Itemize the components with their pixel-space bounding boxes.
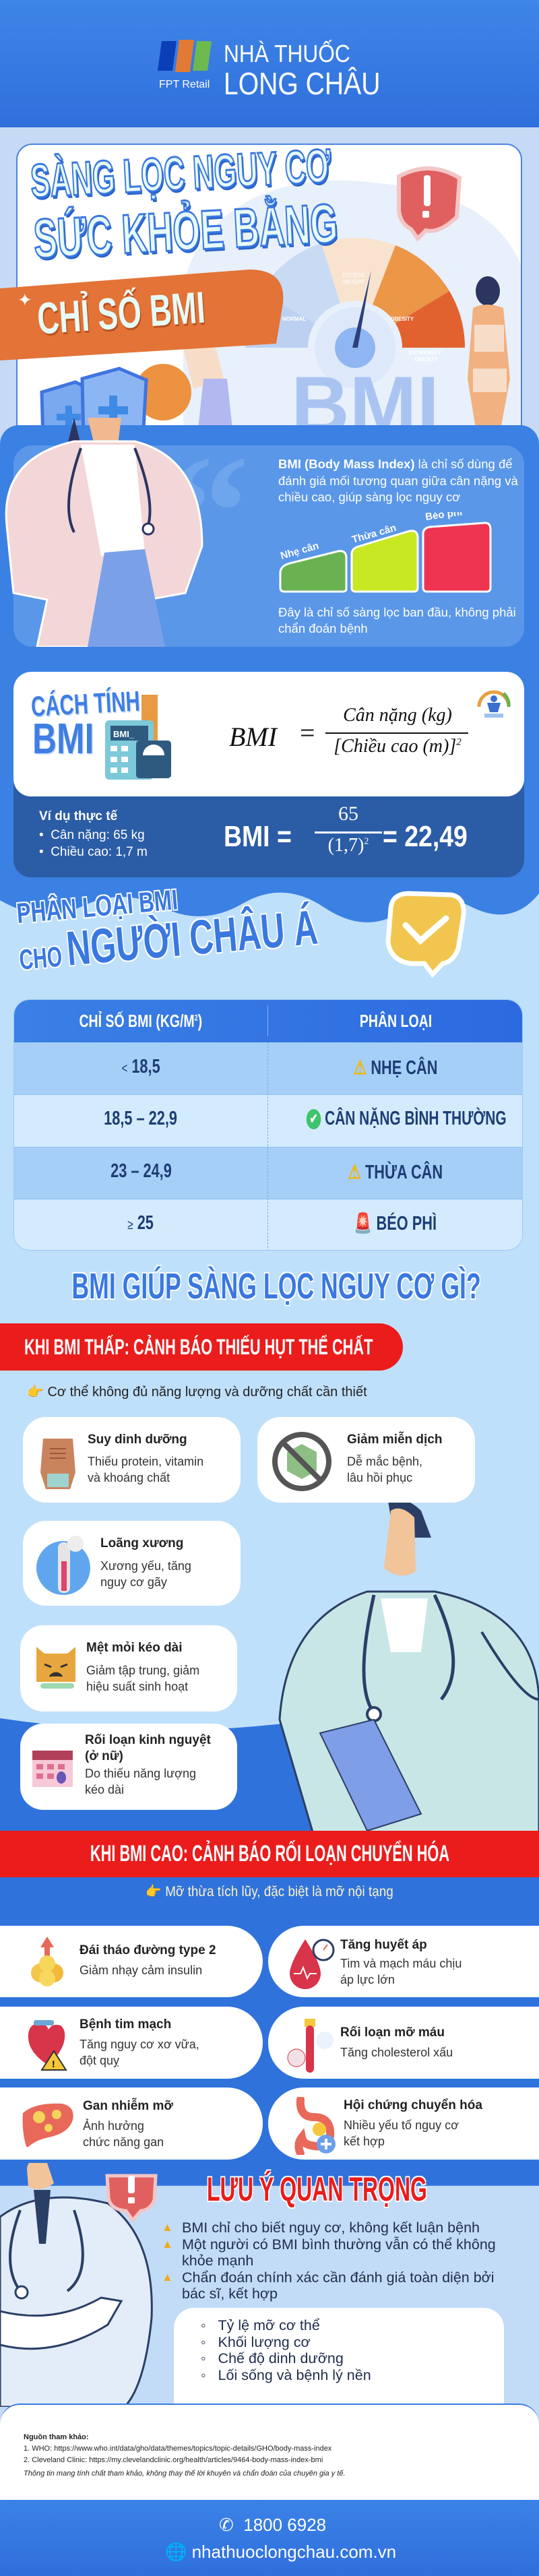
logo: LONG CHÂU [224,66,380,101]
card: mệt mỏi kéo dài: Mệt mỏi kéo dài [86,1641,183,1655]
card: tăng huyết áp: Tim và mạch máu chịu [340,1957,462,1970]
references: Thông tin mang tính chất tham khảo, không thay thế lời khuyên và chẩn đoán của chuyên gia y tế. [24,2470,346,2478]
list: warnings: ▲ [162,2237,173,2251]
hero card [16,144,522,440]
table: BMI classification: < 18,5 [121,1056,160,1077]
contact: website: 🌐 nhathuoclongchau.com.vn [165,2542,396,2562]
card: mệt mỏi kéo dài: hiệu suất sinh hoạt [86,1680,188,1693]
text: example: • Cân nặng: 65 kg [39,828,145,842]
table: BMI classification: PHÂN LOẠI [359,1011,432,1031]
text: BMI thấp intro: 👉 Cơ thể không đủ năng lượng và dưỡng chất cần thiết [27,1385,367,1400]
shields [42,382,96,441]
banner: BMI cao: KHI BMI CAO: CẢNH BÁO RỐI LOẠN CHUYỂN HÓA [90,1841,449,1866]
table: BMI classification: ≥ 25 [128,1212,154,1234]
card: tăng huyết áp: Tăng huyết áp [340,1938,427,1952]
gauge illustration: OBESITY [390,316,414,322]
card: loãng xương: nguy cơ gãy [100,1575,167,1589]
card: giảm miễn dịch: Giảm miễn dịch [347,1433,442,1447]
card: giảm miễn dịch [257,1417,475,1503]
list: warnings: ▲ [162,2271,173,2283]
icon: FPT logo [158,40,212,72]
card: bệnh tim mạch: Tăng nguy cơ xơ vữa, [80,2038,199,2051]
card: rối loạn kinh nguyệt [20,1724,237,1810]
card: tăng huyết áp: áp lực lớn [340,1973,395,1986]
card: hội chứng chuyển hóa [268,2087,539,2160]
card: rối loạn kinh nguyệt: Rối loạn kinh nguyệt [85,1733,211,1747]
icon: thin body [40,1439,75,1489]
formula [229,705,468,757]
gauge illustration: NORMAL [282,316,306,322]
section: lưu ý background [0,2185,539,2407]
text: example [39,809,148,859]
table: BMI classification: ⚠ THỪA CÂN [348,1162,443,1183]
panel: formula: BMI [32,714,94,763]
heading: BMI giúp sàng lọc nguy cơ gì: BMI GIÚP SÀNG LỌC NGUY CƠ GÌ? [71,1266,481,1307]
section: BMI cao background [0,1732,539,2190]
header [0,0,539,127]
card: đái tháo đường [0,1926,263,1997]
card: suy dinh dưỡng: và khoáng chất [88,1471,170,1484]
title: hero: SÀNG LỌC NGUY CƠ [29,139,332,208]
logo [158,40,380,101]
calculation [224,803,468,856]
title: hero: SỨC KHỎE BẰNG [32,193,339,270]
gauge illustration: EXTREMELY [409,350,442,356]
card: rối loạn kinh nguyệt: (ở nữ) [85,1749,123,1763]
chart: weight bars [279,512,492,593]
card: loãng xương: Xương yếu, tăng [100,1559,191,1573]
card: rối loạn kinh nguyệt: kéo dài [85,1783,124,1796]
card: bệnh tim mạch: đột quỵ [80,2054,119,2067]
icon: stomach [294,2097,336,2155]
table: BMI classification: 23 – 24,9 [110,1160,171,1182]
illustration: doctor with clipboard [279,1503,539,1831]
icon: calendar [32,1751,73,1787]
list: warnings: ▲ [162,2221,173,2234]
table: BMI classification: CÂN NẶNG BÌNH THƯỜNG [325,1108,507,1129]
text: example: • Chiều cao: 1,7 m [39,845,148,859]
icon: blood tube [287,2019,334,2073]
icon: heart warning: ! [52,2059,55,2069]
card: giảm miễn dịch: lâu hồi phục [347,1471,412,1484]
card: suy dinh dưỡng: Thiếu protein, vitamin [88,1455,203,1468]
card: gan nhiễm mỡ: Ảnh hưởng [83,2119,144,2133]
text: BMI cao intro: 👉 Mỡ thừa tích lũy, đặc biệt là mỡ nội tạng [146,1884,393,1899]
card: bệnh tim mạch: Bệnh tim mạch [80,2017,171,2032]
calculation: BMI = [224,820,292,853]
icon: liver [23,2104,73,2147]
box: assessment factors: ◦ Lối sống và bệnh lý nền [201,2366,371,2383]
card: gan nhiễm mỡ: Gan nhiễm mỡ [83,2099,173,2113]
card: mệt mỏi kéo dài [20,1625,237,1711]
card: gan nhiễm mỡ [0,2087,263,2160]
card: tăng huyết áp [268,1926,539,1997]
alert icon [399,168,459,239]
card: gan nhiễm mỡ: chức năng gan [83,2135,164,2149]
box: assessment factors: ◦ Chế độ dinh dưỡng [201,2350,344,2366]
card: hội chứng chuyển hóa: Nhiều yếu tố nguy cơ [344,2118,459,2132]
formula: Cân nặng (kg) [343,705,452,726]
calculation: = 22,49 [383,820,468,853]
illustration: doctor (male, arms crossed) [0,2163,153,2407]
woman with apple [173,302,200,334]
table: BMI classification: ✔ [309,1112,318,1127]
panel: BMI definition [13,445,524,647]
icon: blood pressure [290,1939,334,1989]
icon: calculator [105,695,171,780]
heading: phân loại BMI: PHÂN LOẠI BMI [15,883,179,929]
woman right [476,276,500,306]
text: example: Ví dụ thực tế [39,809,117,823]
banner: BMI thấp: KHI BMI THẤP: CẢNH BÁO THIẾU HỤT THỂ CHẤT [24,1335,373,1359]
panel: formula [13,672,524,877]
card: hội chứng chuyển hóa: kết hợp [344,2135,385,2148]
footer [0,2500,539,2576]
formula: BMI [229,722,277,752]
table: BMI classification: CHỈ SỐ BMI (KG/M2) [80,1011,202,1031]
banner: chỉ số BMI: ✦ [18,290,32,310]
banner: BMI thấp [0,1323,403,1371]
card: mệt mỏi kéo dài: Giảm tập trung, giảm [86,1664,199,1677]
box: assessment factors [174,2308,504,2409]
banner: chỉ số BMI [0,270,283,360]
list: warnings [162,2220,496,2302]
card: giảm miễn dịch: Dễ mắc bệnh, [347,1455,422,1468]
card: đái tháo đường: Đái tháo đường type 2 [80,1943,216,1957]
icon: bone [36,1536,90,1595]
contact: phone: ✆ 1800 6928 [219,2515,326,2535]
card: rối loạn mỡ máu: Tăng cholesterol xấu [340,2046,453,2059]
heading: cách tính BMI: CÁCH TÍNH [30,685,141,722]
gauge illustration: EXCESS [343,272,364,278]
text: BMI definition: BMI (Body Mass Index) là chỉ số dùng để đánh giá mối tương quan giữa cân nặng và chiều cao, giúp sàng lọc nguy cơ [278,457,518,504]
box: assessment factors: ◦ Tỷ lệ mỡ cơ thể [201,2317,320,2333]
title: hero [29,139,339,270]
logo: NHÀ THUỐC [224,40,350,67]
list: warnings: BMI chỉ cho biết nguy cơ, không kết luận bệnh [182,2220,480,2236]
heading: phân loại BMI: CHO NGƯỜI CHÂU Á [18,900,320,976]
references: 1. WHO: https://www.who.int/data/gho/data/themes/topics/topic-details/GHO/body-mass-index [24,2445,331,2453]
formula: = [300,718,315,748]
icon: calculator: BMI_ [113,729,135,739]
box: assessment factors: ◦ Khối lượng cơ [201,2334,311,2350]
card: rối loạn mỡ máu [268,2007,539,2079]
card: loãng xương: Loãng xương [100,1536,183,1550]
icon: alert bubble [105,2174,158,2223]
section: classification (light) [0,883,539,1745]
card: bệnh tim mạch [0,2007,263,2079]
gauge illustration: OBESITY [414,356,439,363]
table: BMI classification: 🚨 BÉO PHÌ [354,1213,437,1234]
icon: no virus [272,1432,331,1491]
icon: tired face [36,1647,75,1689]
references: Nguồn tham khảo: [24,2433,89,2441]
gauge illustration: WEIGHT [343,279,364,285]
card: hội chứng chuyển hóa: Hội chứng chuyển hóa [344,2098,482,2112]
card: loãng xương [23,1521,241,1606]
banner: chỉ số BMI: CHỈ SỐ BMI [36,282,207,344]
icon: heart warning [28,2020,67,2071]
list: warnings: Chẩn đoán chính xác cần đánh giá toàn diện bởi bác sĩ, kết hợp [182,2269,495,2302]
chart: weight bars: Thừa cân [350,522,398,546]
list: warnings: Một người có BMI bình thường vẫn có thể không khỏe mạnh [182,2236,496,2269]
heading: lưu ý quan trọng: LƯU Ý QUAN TRỌNG [206,2170,426,2208]
calculation: 65 [338,803,358,825]
references: 2. Cleveland Clinic: https://my.clevelandclinic.org/health/articles/9464-body-mass-index-bmi [24,2456,323,2464]
card: suy dinh dưỡng: Suy dinh dưỡng [88,1433,187,1447]
section: BMI definition (blue) [0,425,539,910]
icon: fat cells [31,1937,63,1986]
table: BMI classification: 18,5 – 22,9 [104,1108,177,1129]
text: note: Đây là chỉ số sàng lọc ban đầu, không phải chẩn đoán bệnh [278,605,516,635]
icon: yellow check [385,891,466,978]
card: suy dinh dưỡng [23,1417,241,1503]
icon: person gauge [477,690,511,718]
panel: BMI definition: “ [168,422,249,601]
banner: BMI cao [0,1831,539,1877]
illustration: doctor (female) [5,418,203,647]
gauge illustration [40,166,521,440]
table: BMI classification: ⚠ NHẸ CÂN [354,1057,437,1079]
card: rối loạn mỡ máu: Rối loạn mỡ máu [340,2025,445,2040]
card: đái tháo đường: Giảm nhạy cảm insulin [80,1964,202,1977]
logo: FPT Retail [159,79,210,90]
table: BMI classification [13,999,523,1251]
card: rối loạn kinh nguyệt: Do thiếu năng lượng [85,1767,196,1780]
calculation: (1,7)2 [328,835,369,856]
formula: [Chiều cao (m)]2 [334,736,462,757]
references [0,2404,539,2505]
chart: weight bars: Nhẹ cân [279,540,320,562]
